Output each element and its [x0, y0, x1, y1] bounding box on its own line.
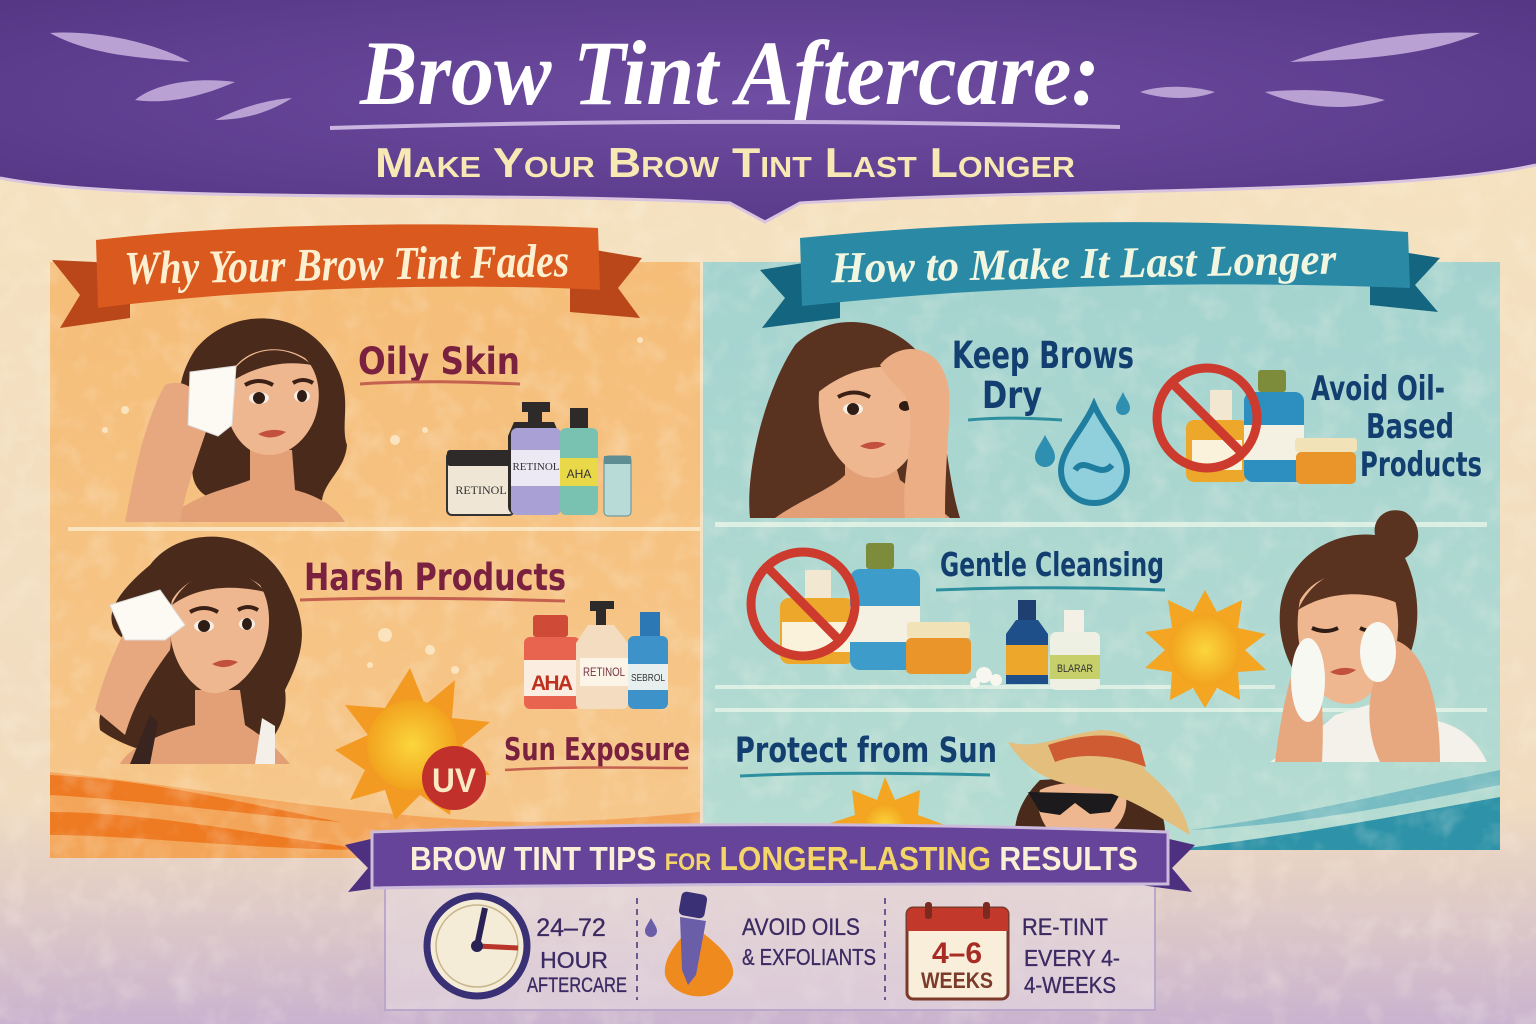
label: harsh products: Harsh Products: [304, 556, 566, 599]
illustration: woman with sun hat and sunglasses: [1008, 730, 1190, 835]
label: protect from sun: Protect from Sun: [735, 731, 997, 771]
bottom tips panel: [345, 824, 1195, 1010]
tip: re-tint every 4-4-weeks: EVERY 4-: [1024, 945, 1120, 971]
tip: avoid oils and exfoliants: AVOID OILS: [742, 914, 860, 941]
products: aha, retinol, serum: AHA: [531, 672, 573, 695]
illustration: woman with tissue, harsh products: [95, 537, 302, 764]
panel: why your brow tint fades: [50, 262, 700, 858]
icon: clock: [427, 896, 527, 996]
icon: calendar 4-6 weeks: 4–6: [932, 937, 982, 970]
label: avoid oil-based products: Based: [1366, 407, 1454, 447]
right ribbon heading: How to Make It Last Longer: [830, 235, 1337, 292]
icon: sun rising: [825, 777, 945, 847]
products: retinol and aha bottles: RETINOL: [455, 483, 507, 497]
label: keep brows dry: Keep Brows: [952, 334, 1134, 377]
speckles: [102, 337, 643, 674]
products: retinol and aha bottles: RETINOL: [512, 461, 560, 473]
tip: avoid oils and exfoliants: [742, 914, 876, 970]
products: gentle cleanser bottles: BLARAR: [1057, 663, 1093, 675]
left ribbon heading: Why Your Brow Tint Fades: [124, 235, 570, 295]
title underline: [330, 122, 1120, 128]
decorative teal waves: [1170, 770, 1500, 850]
tip: re-tint every 4-4-weeks: [1022, 914, 1120, 998]
illustration: woman washing face: [1270, 510, 1487, 762]
subtitle: Make Your Brow Tint Last Longer: [375, 139, 1075, 186]
decorative orange waves: [50, 772, 700, 858]
tip: 24-72 hour aftercare: AFTERCARE: [527, 974, 627, 997]
tip: 24-72 hour aftercare: [527, 914, 627, 997]
tip: avoid oils and exfoliants: & EXFOLIANTS: [742, 944, 876, 970]
label: gentle cleansing: Gentle Cleansing: [940, 545, 1164, 584]
icon: water drops: [1035, 392, 1130, 503]
label: sun exposure: Sun Exposure: [504, 732, 690, 768]
icon: sun with uv badge: [335, 668, 490, 820]
products: retinol and aha bottles: AHA: [567, 467, 591, 481]
products: gentle cleanser bottles: [970, 600, 1100, 690]
icon: no oil-based products: [1157, 368, 1357, 484]
tip: re-tint every 4-4-weeks: 4-WEEKS: [1024, 972, 1116, 998]
label: oily skin: Oily Skin: [358, 340, 520, 383]
products: retinol and aha bottles: [447, 402, 631, 516]
illustration: woman touching brow, keep dry: [749, 322, 960, 518]
icon: calendar 4-6 weeks: WEEKS: [921, 968, 993, 993]
tip: 24-72 hour aftercare: 24–72: [536, 914, 606, 942]
products: aha, retinol, serum: [524, 601, 668, 709]
tips banner: [345, 824, 1195, 892]
icon: sun with uv badge: UV: [432, 762, 476, 800]
icon: calendar 4-6 weeks: [907, 902, 1008, 999]
icon: sun: [1145, 590, 1266, 708]
tips banner: BROW TINT TIPS FOR LONGER-LASTING RESULTS: [410, 840, 1138, 877]
tip: 24-72 hour aftercare: HOUR: [540, 947, 608, 973]
decorative swooshes: [50, 32, 1480, 120]
label: avoid oil-based products: [1311, 369, 1482, 485]
icon: dropper with oil: [645, 891, 733, 996]
label: avoid oil-based products: Avoid Oil-: [1311, 369, 1445, 409]
icon: no harsh cleansing products: [751, 543, 971, 674]
label: avoid oil-based products: Products: [1360, 445, 1482, 485]
products: aha, retinol, serum: SEBROL: [631, 673, 665, 684]
header band: [0, 0, 1536, 222]
illustration: woman blotting oily skin: [125, 318, 347, 522]
left ribbon heading: [52, 224, 642, 328]
title: Brow Tint Aftercare:: [359, 22, 1100, 124]
tip: re-tint every 4-4-weeks: RE-TINT: [1022, 914, 1108, 941]
right ribbon heading: [760, 222, 1440, 328]
products: aha, retinol, serum: RETINOL: [583, 665, 625, 679]
label: keep brows dry: Dry: [982, 374, 1042, 417]
panel: how to make it last longer: [703, 262, 1500, 850]
label: keep brows dry: [952, 334, 1134, 420]
